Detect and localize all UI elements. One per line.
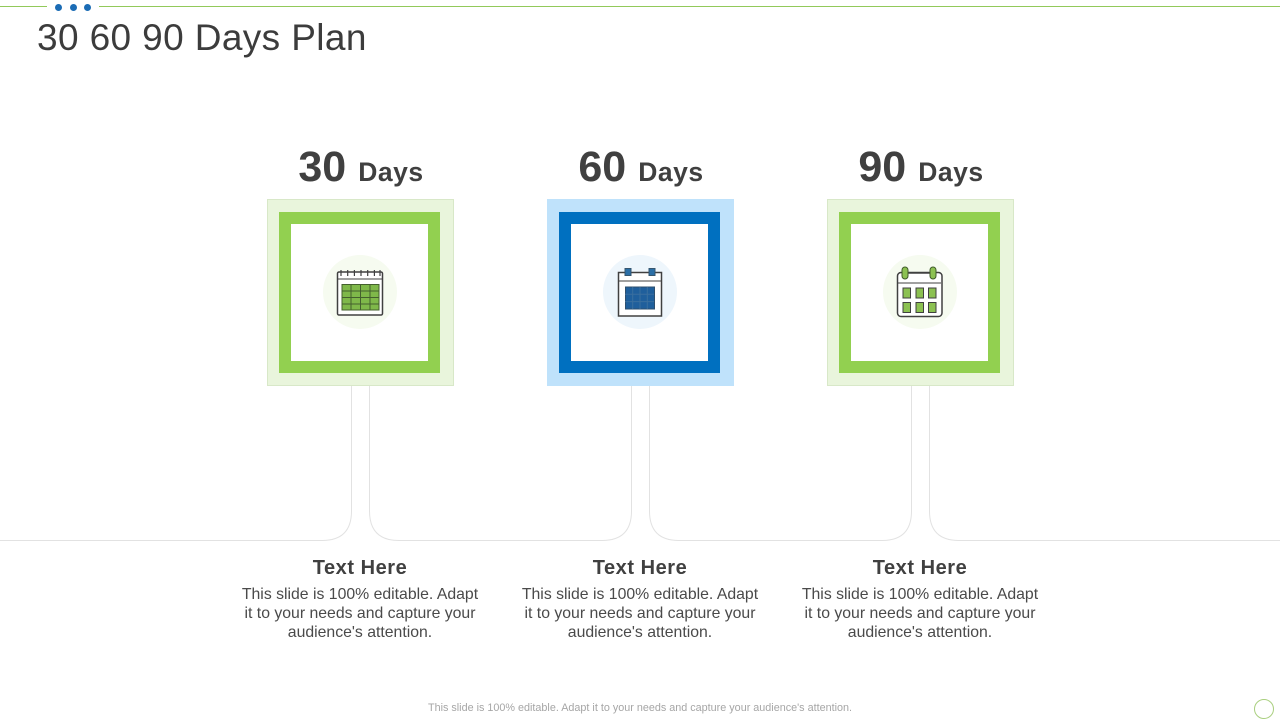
text block: column 3: This slide is 100% editable. Adapt [802, 586, 1038, 603]
footer note: This slide is 100% editable. Adapt it to your needs and capture your audience's attention. [428, 702, 852, 714]
text block: column 2: audience's attention. [568, 624, 712, 641]
text block: column 2 [522, 557, 758, 641]
text block: column 1: This slide is 100% editable. Adapt [242, 586, 478, 603]
panel: 60 days icon box [547, 199, 734, 386]
icon: green calendar [883, 255, 957, 329]
panel: 90 days icon box [827, 199, 1014, 386]
text block: column 1: audience's attention. [288, 624, 432, 641]
text block: column 2: Text Here [593, 557, 687, 579]
text block: column 1: it to your needs and capture your [245, 605, 475, 622]
text block: column 1 [242, 557, 478, 641]
text block: column 3: Text Here [873, 557, 967, 579]
icon: monthly calendar [323, 255, 397, 329]
heading: 60 Days: 60 Days [578, 143, 704, 191]
text block: column 2: This slide is 100% editable. Adapt [522, 586, 758, 603]
text block: column 3 [802, 557, 1038, 641]
text block: column 2: it to your needs and capture your [525, 605, 755, 622]
heading: 90 Days: 90 Days [858, 143, 984, 191]
page marker circle [1254, 699, 1274, 719]
top rule with dots [0, 4, 1280, 11]
icon: blue calendar [603, 255, 677, 329]
panel: 30 days icon box [267, 199, 454, 386]
text block: column 1: Text Here [313, 557, 407, 579]
connector lines [0, 386, 1280, 541]
text block: column 3: it to your needs and capture your [805, 605, 1035, 622]
title: 30 60 90 Days Plan [37, 17, 367, 58]
heading: 30 Days: 30 Days [298, 143, 424, 191]
text block: column 3: audience's attention. [848, 624, 992, 641]
